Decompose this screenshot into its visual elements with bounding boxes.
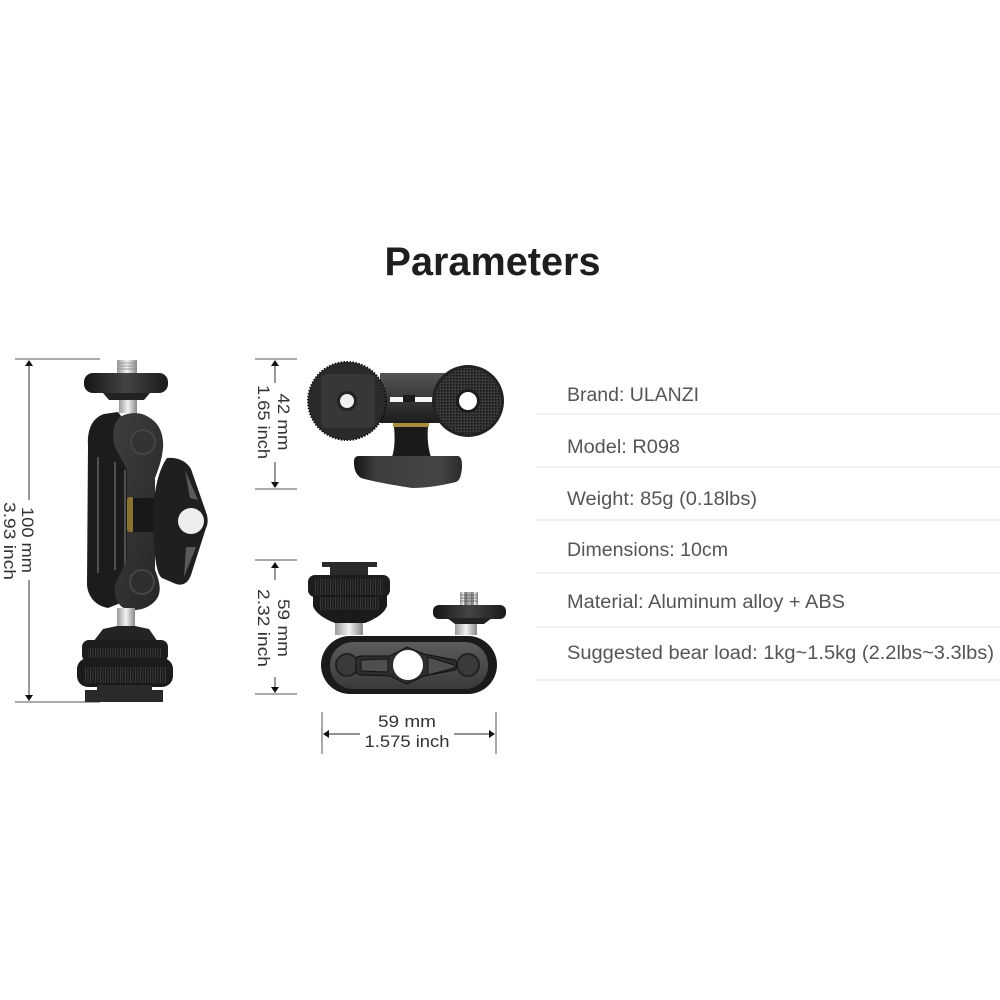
- knurled ring lower: [313, 595, 387, 623]
- dimension: height 100 mm: 100 mm: [18, 507, 37, 573]
- dimension: 59 mm width: 59 mm: [378, 712, 436, 731]
- centre hole: [393, 650, 423, 680]
- dimension: 59 mm height: 2.32 inch: [254, 589, 273, 667]
- product: front view mount: [308, 562, 506, 694]
- knurled ring lower: [77, 658, 173, 687]
- right slot: [428, 657, 455, 675]
- dimension: 59 mm height: [254, 560, 297, 694]
- wing knob: [153, 458, 208, 585]
- right stud: [455, 624, 477, 635]
- brass collar: [393, 423, 429, 427]
- spec row: material: Material: Aluminum alloy + ABS: [567, 592, 845, 613]
- right screw: [460, 592, 478, 606]
- spec row: brand: Brand: ULANZI: [567, 385, 699, 406]
- title: Parameters: [384, 240, 600, 284]
- shoe foot: [322, 562, 377, 575]
- dimension: 42 mm: 42 mm: [274, 394, 293, 450]
- arm front plate: [113, 413, 163, 610]
- dimension: 59 mm height: 59 mm: [274, 599, 293, 657]
- upper stud: [119, 400, 137, 413]
- shoe foot: [85, 685, 163, 702]
- left slot: [361, 659, 388, 672]
- dimension: 42 mm: [254, 359, 297, 489]
- dimension: 59 mm width: 1.575 inch: [364, 732, 450, 751]
- dimension: height 100 mm: [0, 359, 100, 702]
- wing knob: [354, 456, 462, 488]
- left stud: [335, 623, 363, 635]
- right textured disc: [432, 365, 504, 437]
- spec row: model: Model: R098: [567, 437, 680, 458]
- dimension: 42 mm: 1.65 inch: [254, 385, 273, 459]
- knurled ring upper: [308, 575, 390, 597]
- knob hole: [178, 508, 204, 534]
- knob stem: [133, 498, 157, 532]
- dimension: height 100 mm: 3.93 inch: [0, 502, 19, 580]
- brass collar: [127, 497, 134, 532]
- arm rear plate: [87, 412, 128, 608]
- top knurled disc: [84, 373, 168, 393]
- product: side view mount: [77, 360, 208, 702]
- top screw: [117, 360, 137, 374]
- panel: specification list: [536, 385, 1000, 680]
- arm slot: [390, 397, 440, 402]
- spec row: bear load: Suggested bear load: 1kg~1.5kg (2.2lbs~3.3lbs): [567, 643, 994, 664]
- arm plate: [321, 636, 497, 694]
- arm pivots: [336, 654, 358, 676]
- arm pivots: [131, 430, 155, 454]
- spec row: weight: Weight: 85g (0.18lbs): [567, 489, 757, 510]
- right disc: [433, 605, 506, 619]
- dimension: 59 mm width: [322, 712, 496, 754]
- spec row: dimensions: Dimensions: 10cm: [567, 540, 728, 561]
- centre cut-out frame: [356, 647, 457, 684]
- product: top view mount: [308, 362, 504, 488]
- left knurled disc: [308, 362, 386, 440]
- lower cold shoe cap: [93, 626, 158, 642]
- lower stud: [117, 608, 135, 628]
- arm bar: [380, 373, 445, 423]
- knob stem: [392, 427, 431, 457]
- knurled ring upper: [82, 640, 168, 662]
